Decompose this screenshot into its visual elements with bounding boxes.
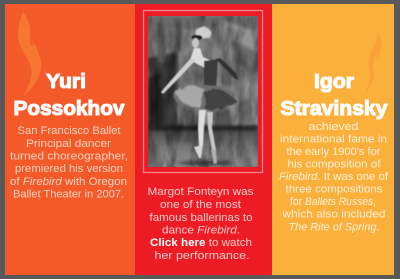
text: Fonteyn caption: one of the most [160,199,242,211]
text: Possokhov biography [10,125,128,200]
text: Fonteyn caption: dance Firebird. [162,224,240,236]
text: Stravinsky biography [279,121,389,234]
text: Stravinsky biography: three compositions [286,184,383,196]
icon: flame left [18,12,41,96]
left arm [161,58,195,94]
text: Possokhov biography: San Francisco Ballet [18,125,121,137]
bodice [204,59,218,88]
neck and chest [190,48,212,68]
heading: Igor Stravinsky: Igor [314,70,354,93]
tutu [174,85,236,111]
icon: flame right [364,32,381,95]
text: Stravinsky biography: his composition of [288,158,381,170]
text: Possokhov biography: of Firebird with Oregon [10,176,127,188]
heading: Yuri Possokhov: Yuri [46,70,86,93]
hair and face [192,35,202,40]
heading: Yuri Possokhov [14,70,125,120]
shoes [194,145,203,158]
text: Stravinsky biography: Firebird. It was one of [279,171,389,183]
text: Fonteyn caption: Margot Fonteyn was [148,186,254,198]
text: Fonteyn caption: famous ballerinas to [150,212,252,224]
backdrop texture [148,16,258,167]
text: Fonteyn caption: Click here to watch [150,237,252,249]
text: Fonteyn caption: her performance. [154,250,250,262]
photo: ballerina [148,16,258,167]
text: Possokhov biography: turned choreographer, [10,150,128,162]
heading: Igor Stravinsky [280,70,388,120]
right arm [216,58,238,80]
text: Possokhov biography: premiered his version [15,163,123,175]
feather plume [196,26,210,40]
text: Stravinsky biography: which also included [281,208,386,220]
photo frame [144,10,262,172]
panel: Igor Stravinsky [272,4,394,275]
text: Possokhov biography: Principal dancer [26,138,111,150]
text: Stravinsky biography: international fame in [280,134,387,146]
text: Fonteyn caption [148,186,254,262]
text: Possokhov biography: Ballet Theater in 2007. [13,188,124,200]
heading: Igor Stravinsky: Stravinsky [280,97,388,120]
heading: Yuri Possokhov: Possokhov [14,97,125,120]
panel: Margot Fonteyn [135,4,272,275]
text: Stravinsky biography: for Ballets Russes, [290,196,376,208]
panel: Yuri Possokhov [5,4,135,275]
text: Stravinsky biography: the early 1900's for [286,146,381,158]
text: Stravinsky biography: achieved [308,121,358,133]
legs [198,110,206,146]
text: Stravinsky biography: The Rite of Spring. [288,222,380,234]
